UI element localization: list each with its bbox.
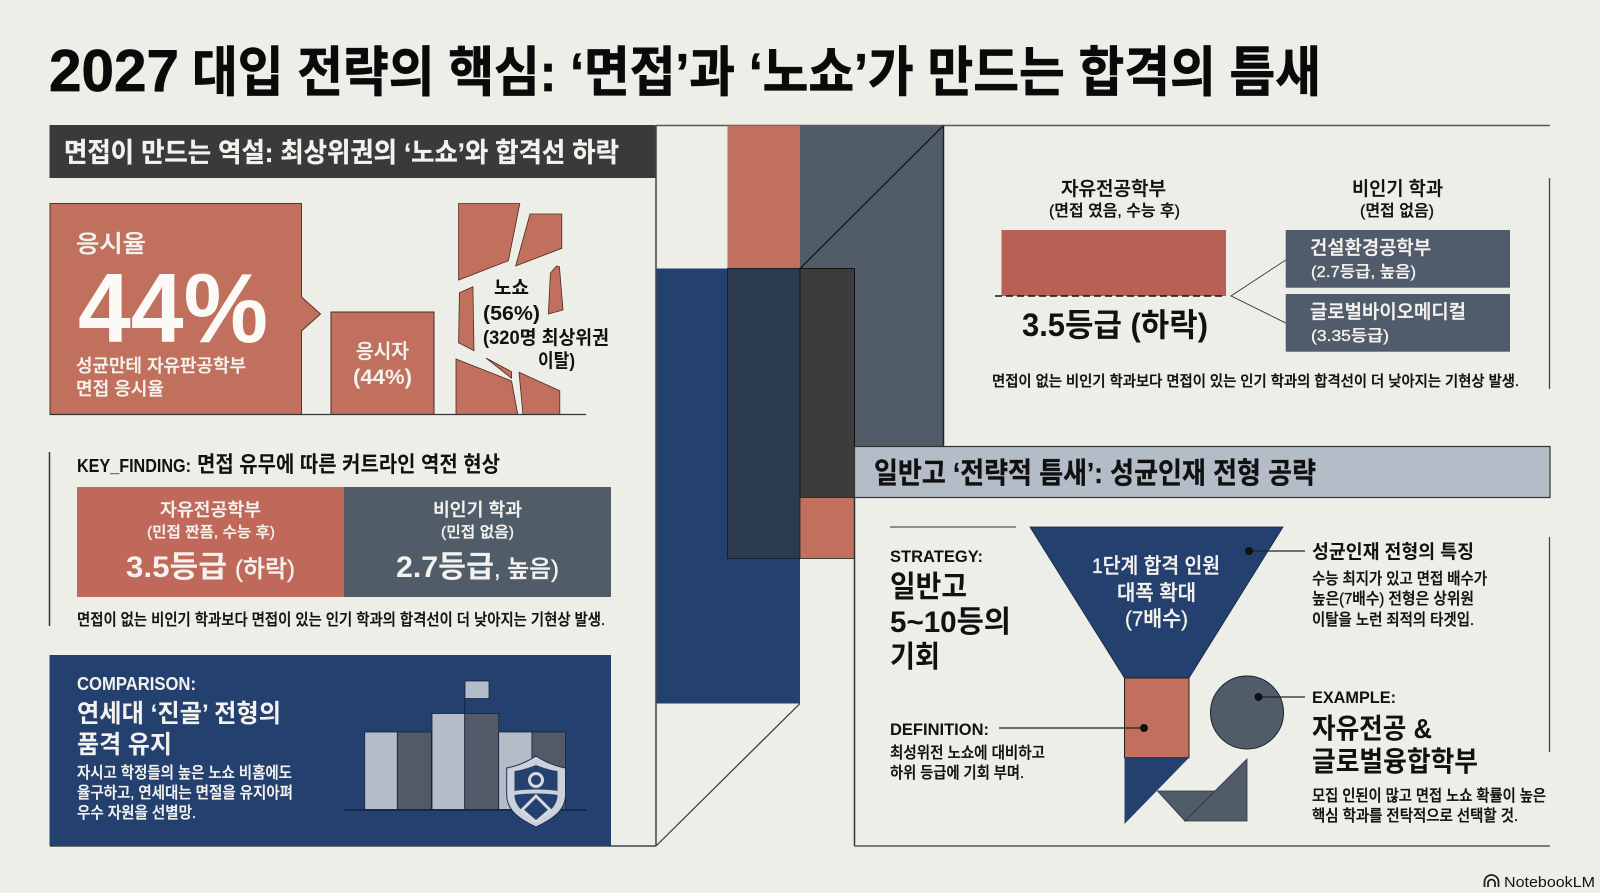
comparison box: unpopular dept [344, 487, 611, 597]
text block: definition: 최성위전 노쇼에 대비하고 [890, 744, 1045, 762]
central geometric blocks [50, 126, 1550, 846]
no-show label: 이탈) [538, 350, 575, 372]
chart: funnel: 대폭 확대 [1117, 582, 1196, 605]
comparison box: free major: (민접 짠픔, 수능 후) [147, 524, 275, 541]
box: global biomedical [1286, 294, 1510, 352]
comparison box: unpopular dept: (민접 없음) [441, 524, 514, 541]
key finding caption: 면접이 없는 비인기 학과보다 면접이 있는 인기 학과의 합격선이 더 낮아지는 기현상 발생. [77, 611, 605, 629]
comparison box: free major: 3.5등급 [126, 551, 227, 584]
box: civil engineering: 건설환경공학부 [1310, 237, 1431, 259]
bar: 3.5 grade [1002, 230, 1226, 296]
attendee label: 응시자 [356, 340, 409, 363]
comparison box: unpopular dept: , 높음) [494, 556, 559, 583]
panel: lower right header bar [854, 446, 1550, 498]
comparison body: 자시고 학정들의 높은 노쇼 비홈에도 [77, 764, 292, 782]
text block: features: 높은(7배수) 전형은 상위원 [1312, 590, 1474, 608]
chart: funnel: (7배수) [1125, 608, 1188, 631]
comparison box: free major: 자유전공학부 [160, 500, 261, 520]
left header text: 면접이 만드는 역설: 최상위권의 ‘노쇼’와 합격선 하락 [64, 138, 619, 168]
key finding label: KEY_FINDING: [77, 456, 191, 476]
text block: features: 수능 최지가 있고 면접 배수가 [1312, 570, 1487, 588]
text block: definition: 하위 등급에 기회 부며. [890, 764, 1024, 782]
icon: university building [344, 681, 586, 810]
text block: features: 이탈을 노런 죄적의 타겟입. [1312, 611, 1474, 629]
box: civil engineering [1286, 230, 1510, 288]
attendance label: 응시율 [76, 231, 146, 258]
box: civil engineering: (2.7등급, 높음) [1311, 263, 1416, 281]
no-show label [483, 278, 609, 372]
title: 대입 전략의 핵심: ‘면접’과 ‘노쇼’가 만드는 합격의 틈새 [192, 43, 1321, 103]
key finding heading: 면접 유무에 따른 커트라인 역전 현상 [197, 452, 500, 477]
text block: example: 글로벌융합학부 [1312, 746, 1478, 777]
box: global biomedical: (3.35등급) [1311, 328, 1389, 345]
panel: 44% attendance block [50, 204, 320, 414]
chart: funnel [999, 527, 1305, 824]
box: global biomedical: 글로벌바이오메디컬 [1310, 301, 1466, 323]
lower right header text: 일반고 ‘전략적 틈새’: 성균인재 전형 공략 [874, 457, 1316, 490]
text block: features: 성균인재 전형의 특징 [1312, 541, 1474, 563]
strategy heading: 일반고 [890, 571, 967, 604]
panel: left header bar [50, 125, 656, 178]
column heading: unpopular dept: 비인기 학과 [1352, 178, 1443, 200]
text block: features [1312, 541, 1487, 629]
example leader [1254, 693, 1305, 701]
chart: no-show shattered block [456, 204, 563, 414]
no-show label: 노쇼 [494, 278, 529, 299]
text block: example [1312, 688, 1546, 825]
panel: key finding [50, 452, 611, 629]
panel: upper right cutline comparison [992, 178, 1550, 390]
NotebookLM mark: NotebookLM [1504, 874, 1595, 891]
comparison label: COMPARISON: [77, 674, 196, 694]
connector arrows [1231, 260, 1286, 323]
upper right caption: 면접이 없는 비인기 학과보다 면접이 있는 인기 학과의 합격선이 더 낮아지는 기현상 발생. [992, 373, 1519, 390]
panel: strategy: 기회 [890, 641, 940, 674]
shape: fallen triangles [1158, 759, 1247, 821]
text block: example: 자유전공 & [1312, 713, 1432, 744]
comparison box: unpopular dept: 2.7등급 [396, 551, 494, 584]
title: 2027 [49, 38, 179, 104]
panel: Yonsei comparison: 품격 유지 [77, 731, 172, 759]
comparison box: free major [77, 487, 344, 597]
no-show label: (56%) [483, 303, 540, 325]
features leader [1245, 547, 1305, 555]
column heading: free major: 자유전공학부 [1061, 178, 1166, 200]
3.5 grade label: 3.5등급 (하락) [1022, 307, 1208, 343]
no-show label: (320명 최상위권 [483, 327, 609, 349]
attendance description: 성균만테 자유판공학부 [76, 356, 246, 376]
shape: circle [1210, 676, 1284, 749]
text block: example: 핵심 학과를 전탁적으로 선택할 것. [1312, 807, 1518, 825]
panel: Yonsei comparison: 율구하고, 연세대는 면절을 유지아펴 [77, 784, 293, 802]
chart: attendee box [331, 312, 434, 414]
big number 44%: 44% [78, 253, 268, 363]
panel: upper right cutline comparison: (면접 였음, 수능 후) [1049, 202, 1180, 220]
panel: strategy: 5~10등의 [890, 606, 1011, 639]
text block: example: EXAMPLE: [1312, 688, 1396, 707]
funnel text: 1단계 합격 인원 [1092, 555, 1220, 578]
icon: shield [507, 756, 566, 827]
panel: 44% attendance block: 면접 응시율 [76, 379, 164, 399]
chart: attendee box: (44%) [353, 366, 412, 389]
panel: Yonsei comparison: 우수 자원을 선별망. [77, 804, 196, 822]
comparison box: unpopular dept: 비인기 학과 [433, 500, 522, 520]
definition leader [999, 724, 1148, 732]
panel: strategy [890, 527, 1016, 674]
comparison box: free major: (하락) [235, 556, 295, 583]
panel: upper right cutline comparison: (면접 없음) [1360, 202, 1434, 220]
text block: definition: DEFINITION: [890, 720, 989, 739]
strategy label: STRATEGY: [890, 547, 983, 566]
text block: example: 모집 인된이 많고 면접 노쇼 확률이 높은 [1312, 787, 1546, 805]
text block: definition [890, 720, 1045, 782]
panel: Yonsei comparison [50, 655, 611, 846]
comparison heading: 연세대 ‘진골’ 전형의 [77, 700, 281, 728]
